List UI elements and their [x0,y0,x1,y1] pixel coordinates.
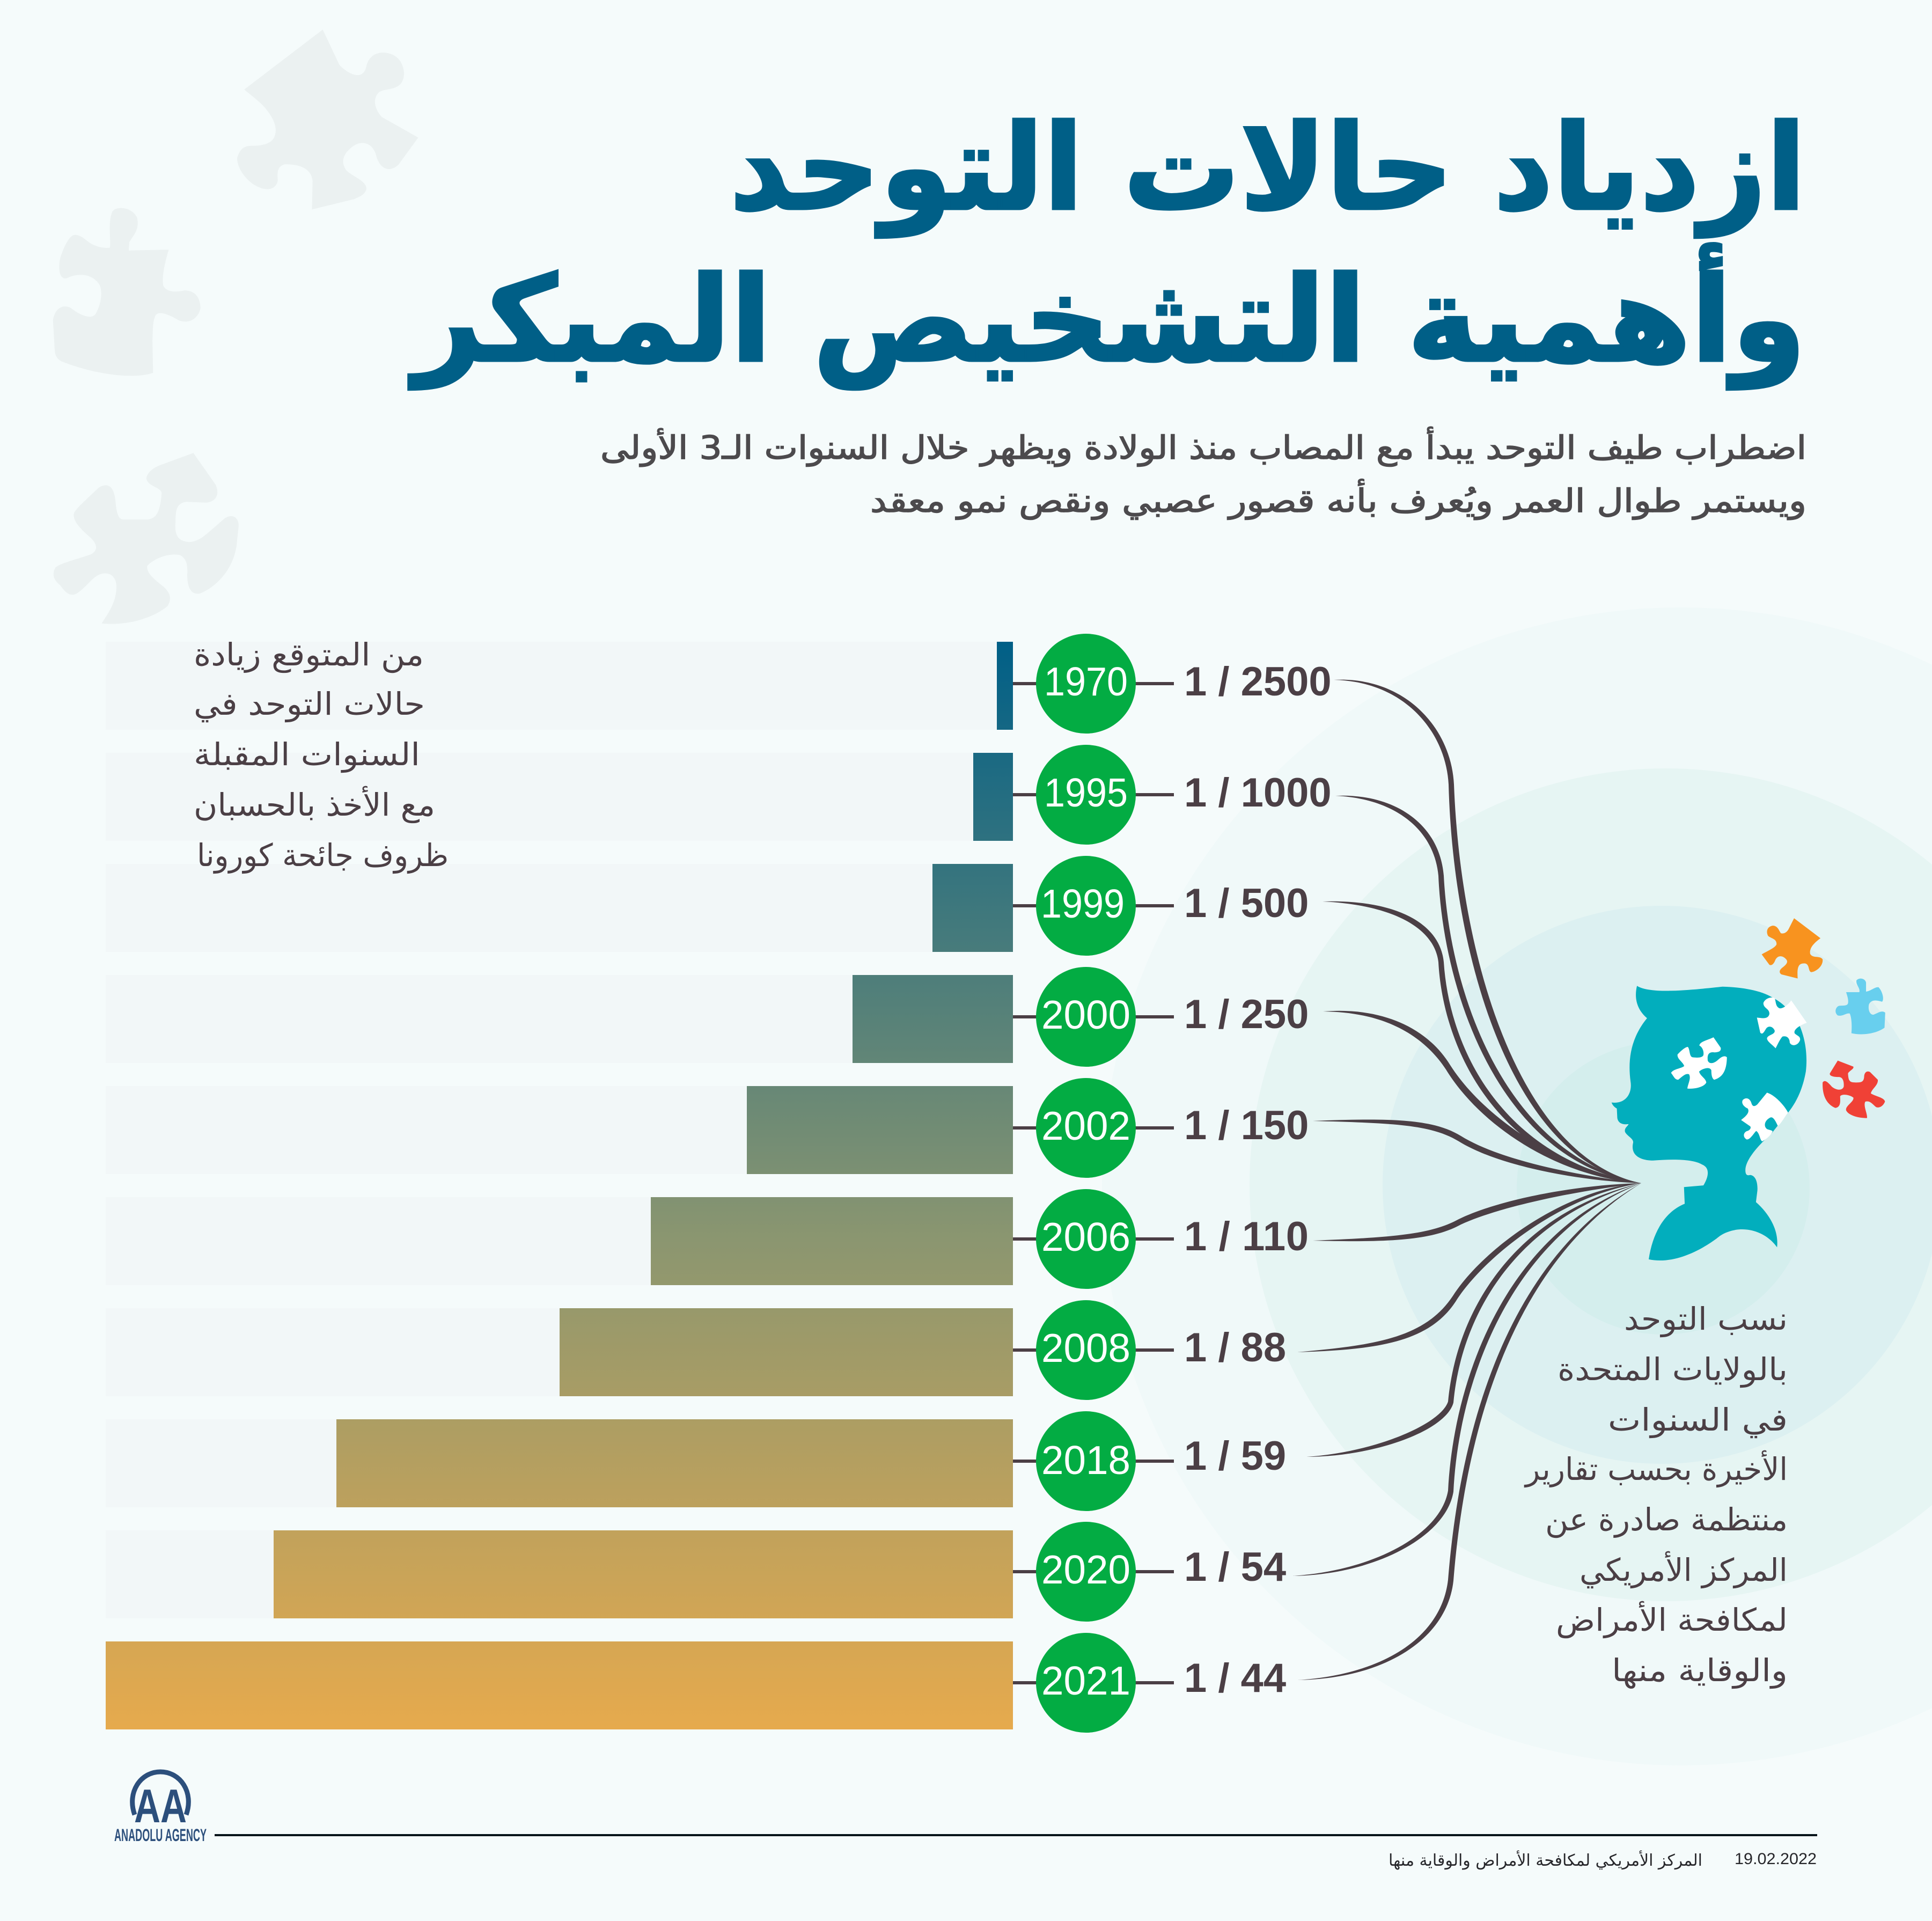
subtitle text: اضطراب طيف التوحد يبدأ مع المصاب منذ الولادة ويظهر خلال السنوات الـ3 الأولى [600,427,1806,467]
subtitle text [600,427,1806,520]
row 1970: 1970 [1044,659,1128,704]
right description text: والوقاية منها [1612,1652,1788,1689]
row 1970 [106,634,1332,734]
left note text: السنوات المقبلة [194,736,420,773]
row 2008: 2008 [1041,1325,1130,1370]
row 2000 [106,967,1309,1067]
row 1999: 1999 [1041,881,1125,926]
row 2018: 2018 [1041,1438,1130,1483]
row 1999: 1 / 500 [1184,881,1309,926]
row 1970: 1 / 2500 [1184,659,1332,705]
row 2020 [106,1522,1286,1622]
subtitle text: ويستمر طوال العمر ويُعرف بأنه قصور عصبي ونقص نمو معقد [870,479,1806,520]
footer date: 19.02.2022 [1735,1850,1817,1868]
right description text: المركز الأمريكي [1580,1551,1788,1589]
right description text: الأخيرة بحسب تقارير [1524,1450,1788,1488]
row 2021 [106,1633,1286,1733]
logo: Anadolu Agency: ANADOLU AGENCY [114,1825,207,1845]
row 2006: 1 / 110 [1184,1214,1309,1259]
row 2018 [106,1411,1286,1511]
right description text: في السنوات [1608,1402,1788,1439]
icon: blue puzzle piece [1835,979,1885,1035]
row 2008 [106,1300,1286,1400]
row 2018: 1 / 59 [1184,1433,1286,1479]
row 1995 [106,745,1332,845]
left note text: حالات التوحد في [194,686,425,723]
row 1995: 1995 [1044,770,1128,815]
bar chart [106,634,1332,1733]
row 2008: 1 / 88 [1184,1325,1286,1370]
row 2006: 2006 [1041,1214,1130,1259]
left note text: مع الأخذ بالحسبان [194,786,435,823]
row 1995: 1 / 1000 [1184,770,1332,816]
right description text: منتظمة صادرة عن [1545,1501,1788,1538]
right description text: بالولايات المتحدة [1558,1351,1788,1388]
logo: Anadolu Agency: AA [134,1779,187,1832]
row 2002: 2002 [1041,1103,1130,1148]
white puzzle pieces [1671,998,1807,1141]
right description text [1524,1301,1788,1689]
row 1999 [106,856,1309,956]
right description text: نسب التوحد [1624,1301,1788,1338]
row 2020: 2020 [1041,1547,1130,1592]
icon: child head silhouette with puzzle pieces [1612,918,1885,1260]
left note text: ظروف جائحة كورونا [197,837,449,874]
background puzzle pieces [53,30,418,624]
row 2006 [106,1189,1309,1289]
footer source text: المركز الأمريكي لمكافحة الأمراض والوقاية منها [1389,1850,1702,1870]
row 2021: 2021 [1041,1658,1130,1703]
row 2000: 1 / 250 [1184,992,1309,1037]
title: ازدياد حالات التوحد [730,99,1806,238]
row 2020: 1 / 54 [1184,1544,1286,1590]
left note text: من المتوقع زيادة [194,636,424,673]
icon: red puzzle piece [1823,1061,1885,1118]
row 2021: 1 / 44 [1184,1655,1286,1701]
footer rule [215,1834,1817,1836]
left note text [194,636,449,874]
row 2002: 1 / 150 [1184,1103,1309,1148]
title [408,99,1806,390]
icon: orange puzzle piece [1762,918,1823,978]
right description text: لمكافحة الأمراض [1556,1601,1788,1639]
row 2002 [106,1078,1309,1178]
concentric background circles [1102,607,1932,1765]
title: وأهمية التشخيص المبكر [408,243,1806,390]
head silhouette [1612,986,1806,1260]
row 2000: 2000 [1041,992,1130,1037]
converging curves [1292,680,1641,1680]
logo: Anadolu Agency [114,1772,207,1845]
